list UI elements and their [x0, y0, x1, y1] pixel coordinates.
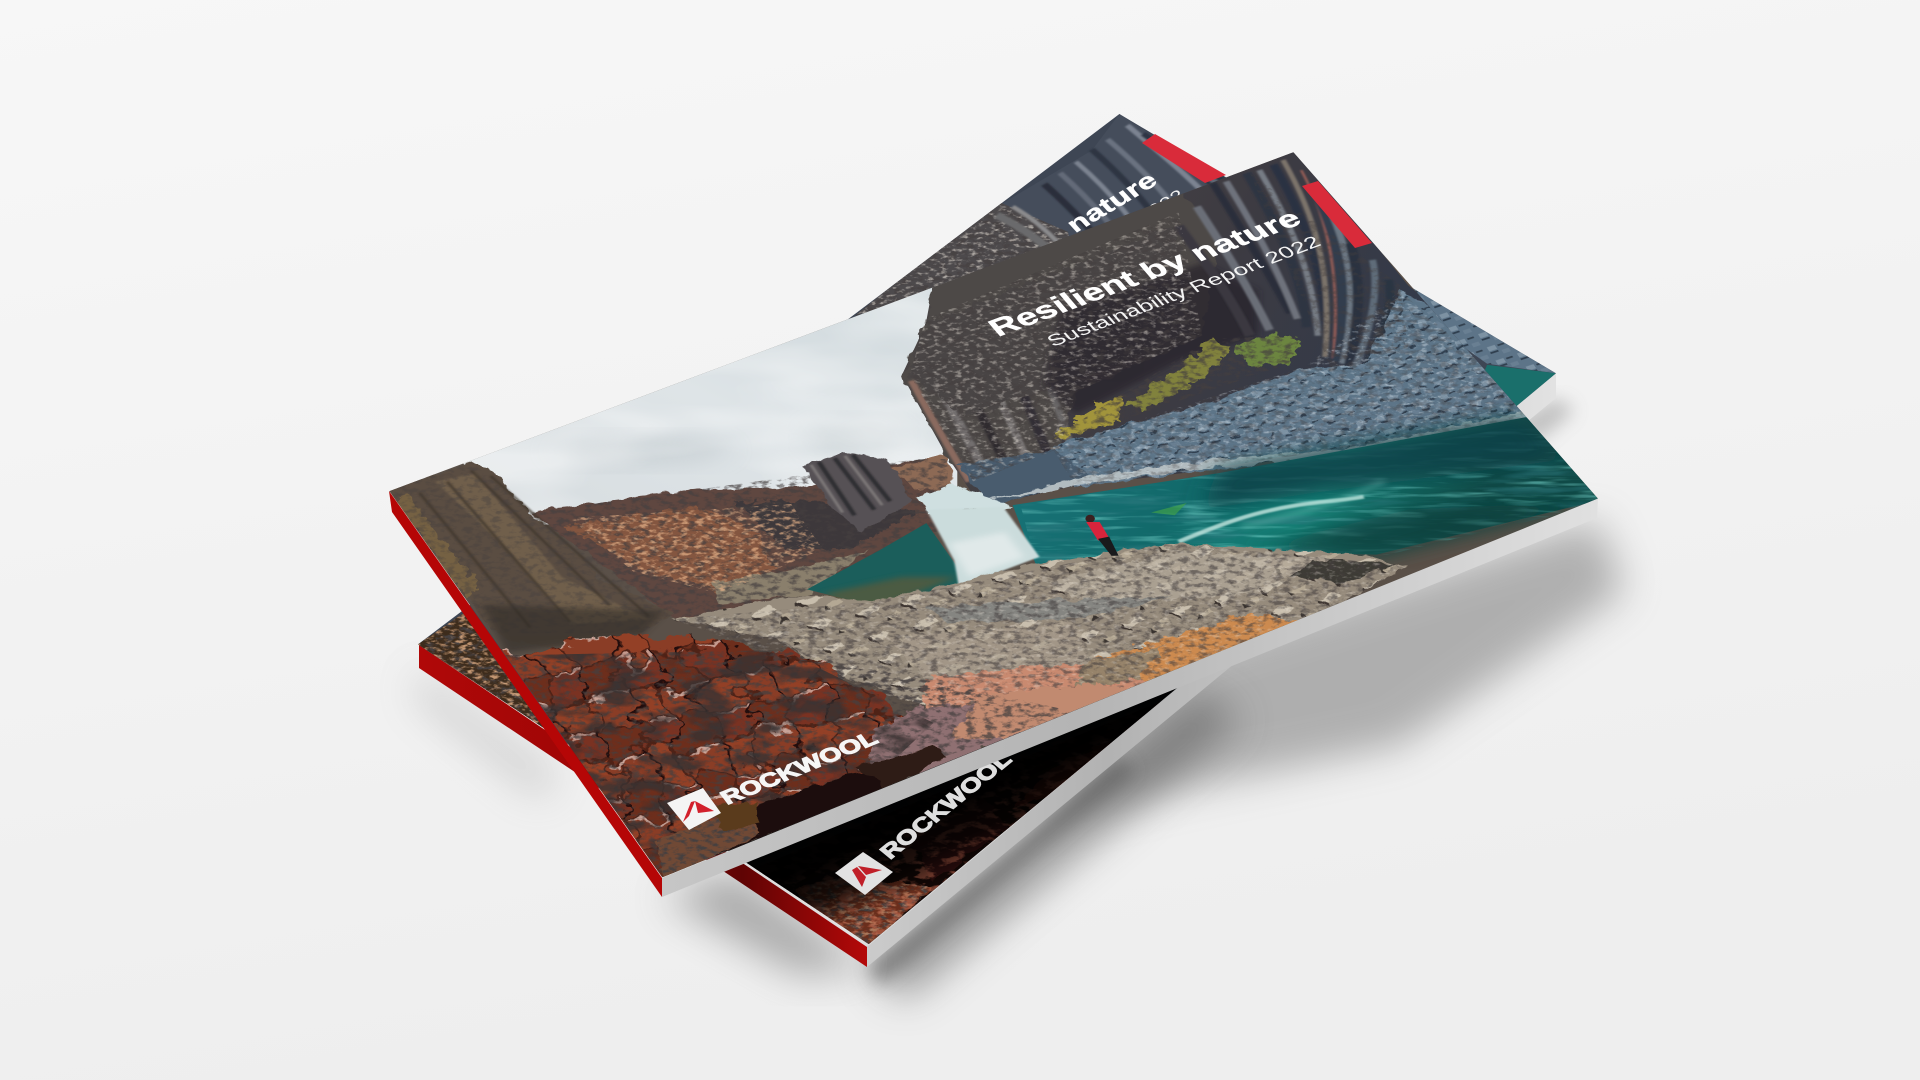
photo: red hexagonal columns	[495, 633, 1139, 880]
photo: foreground stone shelves	[673, 543, 1408, 734]
photo: person in red jacket	[1085, 515, 1119, 556]
lower book: logo tile	[835, 852, 893, 895]
cliff: lower vertical columns	[908, 380, 1073, 483]
photo: dark lower boulders	[657, 745, 949, 883]
lower photo: dark foreground	[728, 672, 1177, 944]
lower book: spine and page edges	[419, 373, 1556, 967]
photo: sky	[459, 274, 957, 527]
lower book: subtitle fragment: 2022	[1134, 186, 1189, 225]
cliff: yellow moss	[1051, 333, 1301, 440]
top book: red tag	[1302, 181, 1372, 248]
water: distant rapids	[918, 484, 1013, 514]
top book: logo tile	[667, 788, 721, 830]
lower book: red tag	[1142, 134, 1226, 183]
photo: far hillside	[530, 454, 953, 622]
cliff: fanning columns	[1179, 160, 1390, 369]
top book: wordmark: ROCKWOOL	[716, 728, 883, 809]
water: sky reflection	[926, 507, 1040, 587]
photo: left basalt column	[388, 462, 674, 653]
lower photo: blue scree	[1414, 288, 1555, 373]
lower book: cover photograph	[418, 114, 1556, 944]
top book: spine and page edge	[389, 491, 1598, 897]
lower book: wordmark: ROCKWOOL	[875, 748, 1017, 863]
top book	[389, 152, 1598, 897]
top book: title: Resilient by nature	[982, 204, 1307, 342]
cliff: blue scree	[1052, 291, 1542, 487]
shadows on table	[415, 398, 1625, 1000]
top book: subtitle: Sustainability Report 2022	[1043, 233, 1325, 350]
photo: great basalt cliff	[902, 145, 1542, 507]
top book: cover photograph	[390, 152, 1598, 878]
water: reflected pond	[807, 523, 959, 605]
lower photo: upper basalt columns	[856, 114, 1226, 316]
lower photo: left fragment	[418, 614, 544, 728]
photo: turquoise water	[807, 414, 1602, 608]
lower book: title: nature	[1060, 167, 1162, 237]
photo: distant basalt column	[803, 452, 911, 532]
lower book	[418, 114, 1556, 967]
lower photo: turquoise wedge	[1485, 365, 1556, 406]
